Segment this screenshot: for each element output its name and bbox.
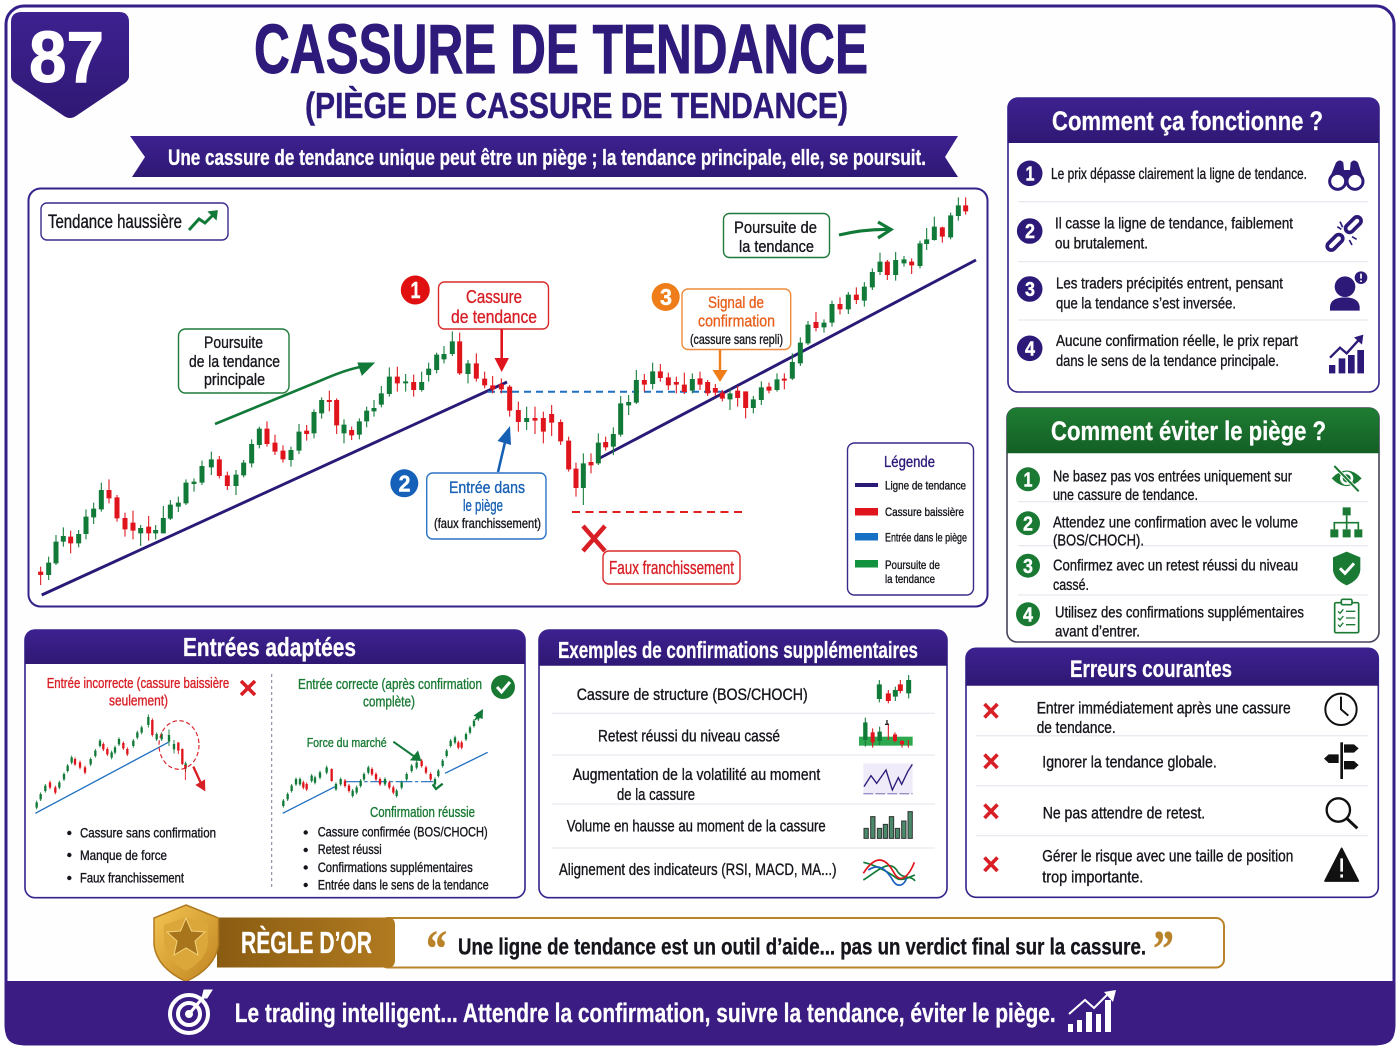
icon: signpost (1324, 742, 1359, 779)
icon: shield check (1333, 552, 1360, 585)
callout: confirmation signal: confirmation (698, 312, 775, 331)
step 2: ou brutalement. (1055, 236, 1148, 252)
panel: main chart (28, 188, 988, 606)
tip 2 (1016, 511, 1298, 550)
mistake texts: Gérer le risque avec une taille de position (1042, 848, 1293, 866)
tip 4: 4 (1023, 604, 1034, 626)
callout: continuation main trend: Poursuite (204, 333, 263, 352)
icon: target (170, 990, 212, 1033)
example rows: Augmentation de la volatilité au moment (573, 765, 820, 784)
callout: continuation main trend (178, 329, 289, 393)
callout: trap entry: (faux franchissement) (434, 515, 541, 531)
tip 2: 2 (1023, 514, 1033, 536)
footer text: Le trading intelligent... Attendre la confirmation, suivre la tendance, éviter le piège. (235, 998, 1056, 1028)
marker 2 (390, 469, 418, 497)
callout: trap entry: Entrée dans (449, 478, 525, 497)
tip 3 (1016, 554, 1298, 594)
left bullets: Cassure sans confirmation (80, 825, 216, 841)
mistake texts: Ne pas attendre de retest. (1043, 804, 1205, 822)
step 3: Les traders précipités entrent, pensant (1056, 276, 1283, 292)
panel: extra confirmations (539, 630, 947, 898)
marker 3 (652, 283, 680, 311)
header: Erreurs courantes (1070, 656, 1232, 683)
header (539, 630, 947, 666)
tip 3: Confirmez avec un retest réussi du niveau (1053, 558, 1298, 575)
callout: trap entry: le piège (463, 496, 503, 515)
mistake texts (1037, 699, 1293, 887)
header: Exemples de confirmations supplémentaires (558, 637, 918, 663)
quote close: ” (1153, 921, 1174, 978)
panel: adapted entries (25, 630, 525, 898)
header (1008, 98, 1379, 143)
callout: confirmation signal: Signal de (708, 293, 764, 312)
right heading (298, 676, 482, 710)
right bullets (304, 824, 489, 892)
arrow: red down (494, 329, 509, 372)
arrow: blue up (498, 426, 511, 472)
candlesticks left part (41, 331, 510, 585)
legend: Poursuite de (885, 558, 940, 572)
badge: number 87: 87 (29, 18, 104, 98)
callout: confirmation signal: (cassure sans repli) (690, 331, 783, 347)
example rows: de la cassure (617, 785, 695, 804)
mini chart: wrong entry (35, 714, 205, 813)
left bullets: Faux franchissement (80, 870, 184, 886)
mistake crosses (984, 704, 998, 871)
annotation: market strength: Force du marché (307, 735, 387, 750)
marker 1 (401, 276, 430, 304)
marker 2: 2 (398, 470, 410, 496)
footer (5, 981, 1395, 1045)
callout: false breakout (603, 551, 740, 584)
header (1007, 408, 1379, 453)
badge: number 87 (11, 12, 129, 118)
icon: magnifier (1327, 798, 1357, 828)
label: uptrend (41, 203, 228, 240)
left bullets: Manque de force (80, 847, 167, 863)
right bullets: Entrée dans le sens de la tendance (318, 876, 489, 892)
callout: trend continuation (724, 214, 830, 258)
mistake texts: de tendance. (1037, 719, 1116, 737)
header (25, 630, 525, 664)
panel: how it works (1008, 98, 1379, 392)
tip 2: (BOS/CHOCH). (1053, 532, 1144, 550)
banner ribbon: Une cassure de tendance unique peut être un piège ; la tendance principale, elle, se poursuit. (168, 145, 926, 170)
mistake texts: Entrer immédiatement après une cassure (1037, 699, 1291, 717)
icon: volatility (863, 763, 913, 794)
step 3 (1017, 276, 1283, 312)
callout: trend continuation: Poursuite de (734, 218, 817, 237)
example rows: Alignement des indicateurs (RSI, MACD, MA...) (559, 860, 836, 879)
callout: trend break: Cassure (466, 287, 522, 307)
callout: trend break: de tendance (451, 307, 537, 327)
step 2: 2 (1025, 221, 1035, 243)
header (966, 648, 1378, 686)
tip 1: une cassure de tendance. (1053, 487, 1198, 504)
mistake texts: trop importante. (1042, 869, 1143, 887)
legend: Ligne de tendance (885, 478, 966, 492)
icon: crossed eye (1332, 466, 1362, 491)
red cross (241, 681, 255, 695)
red cross (583, 526, 605, 551)
subtitle: (PIÈGE DE CASSURE DE TENDANCE) (305, 85, 848, 126)
tip 1: Ne basez pas vos entrées uniquement sur (1053, 469, 1293, 486)
example rows: Retest réussi du niveau cassé (598, 727, 780, 746)
step 4: 4 (1025, 338, 1036, 360)
step 3: 3 (1025, 279, 1035, 301)
candlesticks right part (518, 197, 966, 505)
icon: hierarchy (1330, 507, 1362, 537)
tip 1 (1016, 467, 1293, 504)
callout: continuation main trend: de la tendance (189, 352, 280, 371)
icon: volume bars (864, 812, 912, 838)
left heading: seulement) (109, 692, 168, 710)
tip 4: Utilisez des confirmations supplémentaires (1055, 604, 1304, 621)
title: CASSURE DE TENDANCE (254, 10, 868, 88)
mistake texts: Ignorer la tendance globale. (1042, 754, 1217, 772)
tip 2: Attendez une confirmation avec le volume (1053, 514, 1298, 531)
quote open: “ (426, 921, 447, 978)
right heading: Entrée correcte (après confirmation (298, 676, 482, 693)
legend: la tendance (885, 572, 935, 586)
marker 1: 1 (410, 277, 421, 303)
tip 4 (1016, 602, 1304, 641)
step 4: dans le sens de la tendance principale. (1056, 353, 1279, 370)
golden rule label: RÈGLE D’OR (241, 925, 372, 960)
right bullets: Confirmations supplémentaires (318, 859, 473, 875)
icon: warning (1325, 848, 1358, 881)
trendline left (42, 382, 507, 595)
step 1 (1017, 160, 1307, 186)
arrow: orange down (712, 350, 728, 382)
step 3: que la tendance s’est inversée. (1056, 296, 1236, 312)
arrow: green right (839, 222, 891, 238)
left heading: Entrée incorrecte (cassure baissière (47, 675, 229, 692)
callout: trap entry (427, 473, 546, 539)
right heading: complète) (363, 694, 415, 710)
header: Comment éviter le piège ? (1051, 416, 1326, 446)
callout: confirmation signal (682, 289, 791, 350)
tip 1: 1 (1024, 470, 1032, 492)
check badge (491, 675, 515, 699)
marker 3: 3 (660, 284, 672, 310)
legend (848, 443, 974, 595)
tip 3: cassé. (1053, 577, 1089, 594)
icon: broken chain (1326, 215, 1363, 252)
callout: trend continuation: la tendance (739, 237, 814, 256)
golden rule bar (154, 905, 1224, 982)
example rows: Volume en hausse au moment de la cassure (567, 817, 826, 836)
icon: rising chart (1068, 990, 1116, 1032)
blue dashed level (488, 391, 724, 393)
legend: Légende (884, 454, 935, 471)
label: uptrend: Tendance haussière (48, 212, 182, 233)
quote text: Une ligne de tendance est un outil d’aide... pas un verdict final sur la cassure. (458, 934, 1146, 960)
red dashed low (572, 511, 743, 513)
callout: trend break (438, 282, 548, 329)
step 1: Le prix dépasse clairement la ligne de tendance. (1051, 166, 1307, 183)
icon: checklist (1335, 599, 1359, 633)
icon: candles (879, 675, 909, 703)
step 2: Il casse la ligne de tendance, faiblement (1055, 216, 1293, 232)
icon: person alert (1330, 271, 1367, 311)
left heading (47, 675, 229, 710)
icon: gold shield (154, 905, 218, 982)
panel: avoid the trap (1007, 408, 1379, 642)
golden rule label (217, 918, 395, 968)
annotation: confirmation success: Confirmation réussie (370, 804, 475, 821)
callout: false breakout: Faux franchissement (609, 558, 734, 578)
header: Comment ça fonctionne ? (1052, 106, 1323, 136)
trendline right (600, 260, 976, 458)
example rows (559, 685, 836, 879)
tip 3: 3 (1023, 556, 1033, 578)
callout: continuation main trend: principale (204, 370, 265, 389)
legend: Cassure baissière (885, 505, 964, 519)
icon: rising bars (1329, 335, 1364, 373)
right bullets: Retest réussi (318, 841, 382, 857)
tip 4: avant d’entrer. (1055, 624, 1140, 641)
step 2 (1017, 216, 1293, 252)
legend: Entrée dans le piège (885, 530, 967, 544)
step 4: Aucune confirmation réelle, le prix repart (1056, 333, 1298, 350)
header: Entrées adaptées (183, 632, 356, 662)
arrow: green continuation (215, 363, 374, 424)
step 4 (1017, 333, 1298, 370)
left bullets (67, 825, 216, 886)
icon: retest (859, 718, 913, 748)
step 1: 1 (1026, 164, 1034, 186)
example rows: Cassure de structure (BOS/CHOCH) (577, 685, 808, 704)
panel: common mistakes (966, 648, 1378, 897)
icon: clock (1325, 694, 1357, 725)
banner ribbon (130, 136, 958, 177)
icon: indicators (863, 860, 915, 885)
right bullets: Cassure confirmée (BOS/CHOCH) (318, 824, 488, 840)
icon: binoculars (1329, 160, 1364, 189)
mini chart: right entry (283, 709, 488, 813)
